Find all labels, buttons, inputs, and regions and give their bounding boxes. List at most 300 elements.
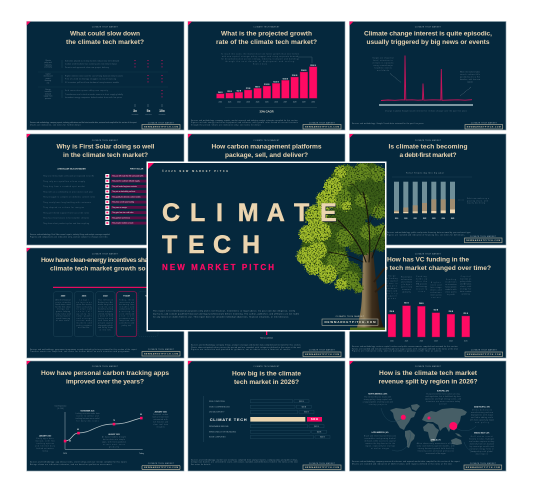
- footer: Figures are indicative and provided as guidance, not as advice or as a forecast of results.: [191, 348, 292, 351]
- brand button: NEWMARKETPITCH.COM: [324, 320, 376, 324]
- footer: NEWMARKETPITCH.COM: [305, 353, 339, 356]
- note: Europe: and regulation, but is held back by slow: [426, 395, 461, 398]
- bar chart: $102 B: [264, 84, 270, 86]
- factor rows: pressure: [45, 98, 51, 100]
- footer: CLIMATE TECH MARKET: [148, 348, 174, 351]
- stacked bar chart: equity declining: [467, 201, 485, 204]
- factor rows: Grid connection queues delay new capacity: [65, 89, 108, 92]
- annotation left: headline events: [374, 66, 392, 70]
- footer: Charts show estimated values across the period and are rounded, with categories defined in the notes at the end.: [191, 346, 302, 349]
- curve chart: Today: [139, 453, 144, 455]
- size comparison chart: $33 B: [302, 406, 307, 408]
- time horizons: revenues: [132, 114, 138, 116]
- comparison table: They recycle modules at scale: [112, 222, 134, 225]
- panel: what could slow down: the climate tech market?: [66, 39, 144, 46]
- timeline: wind projects: [56, 315, 70, 318]
- annotation right: search volume falls: [460, 74, 480, 76]
- column notes: share, with: [460, 285, 471, 288]
- factor rows: intensity and: [44, 75, 53, 78]
- note: Asia Pacific: and India adding scale: [471, 417, 493, 419]
- footer: Sources and methodology: company filings, analyst coverage and market data compiled and reviewed for this section.: [191, 344, 302, 346]
- note: January 2025: Personal carbon: [153, 414, 168, 416]
- timeline: economics and: [119, 318, 134, 320]
- note: Latin America: at earlier stages: [371, 447, 389, 450]
- timeline: policy risk.: [122, 325, 132, 327]
- size comparison chart: $35 B: [304, 412, 310, 414]
- panel: first solar: CLIMATE TECH MARKET: [92, 139, 118, 142]
- timeline: grants, helping: [56, 310, 70, 313]
- note: January 2025: insights: [156, 426, 165, 428]
- note: January 2025: automated with: [154, 418, 168, 421]
- disclaimer: key facts, and consult qualified financial and legal professionals before investing. The author, publisher, and affiliates are not liable: [153, 312, 299, 315]
- timeline: TODAY: [123, 294, 131, 297]
- stacked bar chart: 2022: [423, 218, 426, 220]
- column notes: deals and: [430, 290, 442, 292]
- column notes: pull in new: [401, 286, 413, 288]
- column notes: [386, 275, 472, 300]
- column notes: Surge: [388, 276, 396, 278]
- note: January 2025: [152, 410, 169, 428]
- footer: Values are rounded and include seed through late stage rounds, with categories defined in the notes at the end.: [352, 347, 459, 350]
- panel: what could slow down: CLIMATE TECH MARKET: [92, 25, 118, 28]
- panel: carbon tracking apps: [27, 361, 184, 471]
- column notes: to profit: [447, 293, 455, 296]
- panel: market size 2026: CLIMATE TECH MARKET: [253, 365, 280, 368]
- note: November 2021: for daily decisions: [76, 420, 99, 422]
- footer: NEWMARKETPITCH.COM: [466, 466, 500, 469]
- panel: debt first: [350, 134, 506, 245]
- note: Latin America: region, especially for startups: [365, 444, 395, 448]
- column notes: stabilises: [445, 280, 457, 284]
- note: January 2025: rich features and: [153, 420, 168, 424]
- bar chart: 2021: [228, 102, 231, 104]
- highlighted row: CLIMATE TECH: [210, 417, 247, 422]
- column notes: despite: [387, 284, 397, 288]
- footer: CLIMATE TECH MARKET: [471, 122, 497, 124]
- note: Asia Pacific: ASIA PACIFIC | 30%: [474, 406, 490, 408]
- panel: clean energy incentives: [27, 248, 184, 358]
- column notes: energy for: [460, 288, 472, 290]
- note: August 2023: across most users: [103, 443, 125, 446]
- factor rows: financing: [45, 80, 51, 82]
- timeline: The Inflation: [98, 298, 113, 302]
- footer: NEWMARKETPITCH.COM: [467, 353, 501, 356]
- footer: CLIMATE TECH MARKET: [309, 348, 335, 352]
- column notes: as low rates: [401, 278, 412, 281]
- comparison table: They depend on volume for margins: [43, 207, 84, 209]
- factor rows: demand: [45, 93, 51, 95]
- note: Asia Pacific: China dominates: [472, 408, 492, 412]
- comparison table: They buy from a crowded spot market: [43, 185, 86, 188]
- heading: Climate change interest is quite episodic,: [364, 30, 492, 37]
- note: November 2021: NOVEMBER 2021: [81, 410, 95, 412]
- note: January 2020: behind estimates: [36, 447, 54, 450]
- curve chart: 75: [113, 420, 115, 422]
- timeline: energy tax: [57, 308, 69, 311]
- footer: Sources and methodology: First Solar annual reports, industry filings and analyst coverage compiled.: [30, 233, 111, 236]
- annotation left: brief, attention to: [374, 59, 393, 62]
- note: Europe: EUROPE | 22%: [437, 390, 449, 392]
- bar chart: 2025: [464, 341, 468, 343]
- column notes: rises: [418, 291, 425, 293]
- column notes: late stage: [430, 286, 442, 289]
- note: Middle East: and carbon capture as they: [469, 440, 494, 443]
- bar chart: 2030: [311, 102, 315, 104]
- factor rows: VC investors pull back from hardware heavy business models: [65, 81, 119, 84]
- bar chart: 2025: [265, 102, 269, 104]
- panel: carbon management: [188, 134, 345, 245]
- factor rows: supply chain: [44, 96, 53, 98]
- bar chart: [216, 57, 317, 114]
- note: November 2021: tracking became more useful: [76, 417, 100, 420]
- comparison table: They gain from tax credit rules: [112, 211, 134, 214]
- timeline: NEXT: [145, 295, 151, 297]
- stacked bar chart: Debt now makes up a: [467, 197, 489, 200]
- heading: How have clean-energy incentives shaped the: [41, 257, 169, 264]
- intro paragraph: Source data: [253, 62, 267, 66]
- timeline: early solar and: [56, 313, 71, 315]
- heading: What could slow down: [70, 30, 140, 37]
- column notes: pandemic: [386, 288, 398, 290]
- footer: Sources and methodology: company reports, industry publications and the latest market data, reviewed and compiled for this section of the report.: [30, 121, 138, 124]
- note: North America: NORTH AMERICA | 38%: [368, 392, 388, 396]
- note: Middle East: Gulf states invest: [471, 435, 493, 438]
- column notes: narrows as: [460, 278, 471, 280]
- bar chart: 2023: [434, 341, 438, 343]
- column notes: globally: [402, 292, 411, 294]
- timeline: core demand: [119, 313, 134, 315]
- intro paragraph: To reach this scale, the market must see faster growth than ever before: [221, 52, 299, 56]
- comparison headers: A REGULAR SILICON MAKER: [57, 168, 86, 170]
- footer: [30, 233, 111, 238]
- footer: See notes for details.: [191, 463, 212, 466]
- bar chart: $91 B: [404, 303, 410, 305]
- footer: [387, 231, 502, 243]
- note: Middle East: [469, 432, 494, 456]
- timeline: 2015: [82, 295, 87, 297]
- comparison table: They own the cadmium telluride supply: [112, 180, 140, 183]
- footer: NEWMARKETPITCH.COM: [305, 126, 339, 128]
- footer: Figures include energy transition equipment and software, with growth rates based on recent forecasts: [191, 121, 298, 124]
- footer: Sources and methodology: app release notes, store listings and user reviews compiled for this report.: [30, 460, 128, 464]
- comparison table: They rarely have long backlog with customers: [43, 201, 91, 204]
- factor rows: risk: [47, 82, 49, 84]
- disclaimer: for any losses or claims from its use. This report does not consider individual objectives, financial situations, or risk tolerance.: [153, 315, 290, 318]
- footer: NEWMARKETPITCH.COM: [305, 466, 339, 469]
- column notes: Record year: [401, 276, 412, 278]
- footer: [352, 345, 502, 356]
- time horizons: revenues: [159, 114, 165, 116]
- size comparison chart: RIDE COMPUTING: [209, 401, 225, 403]
- note: Middle East: national energy firms in: [470, 448, 494, 450]
- note: Middle East: MIDDLE EAST | 4%: [474, 432, 490, 434]
- column notes: Funding: [416, 276, 427, 278]
- footer: [30, 121, 180, 129]
- panel: carbon management: CLIMATE TECH MARKET: [253, 139, 280, 142]
- brand button: CLIMATE TECH MARKET: [336, 315, 365, 318]
- heading: How carbon management platforms: [212, 143, 322, 150]
- time horizons: [132, 104, 165, 116]
- heading: Is climate tech becoming: [388, 143, 468, 150]
- size comparison chart: SEMICONDUCTOR PACKAGING: [209, 430, 237, 433]
- bar chart: 2022: [237, 102, 241, 104]
- panel: revenue by region: [350, 361, 506, 471]
- note: Africa: solar and mobile payment models, with: [417, 444, 455, 448]
- title: TECH: [163, 232, 261, 260]
- bar chart: 2024: [256, 102, 259, 104]
- column notes: favour proven: [445, 286, 457, 288]
- timeline: 2022: [103, 295, 109, 297]
- panel: revenue by region: revenue split by region in 2026?: [378, 378, 478, 386]
- curve chart: [55, 406, 144, 455]
- bar chart: 2020: [390, 341, 394, 343]
- footer: NEWMARKETPITCH.COM: [144, 466, 178, 469]
- line chart: [379, 56, 473, 112]
- column notes: Higher: [431, 282, 441, 284]
- note: January 2020: JANUARY 2020: [39, 434, 51, 438]
- column notes: IRA passes: [416, 282, 427, 286]
- image: tree: [296, 163, 385, 330]
- note: January 2020: manual, with few: [36, 440, 55, 442]
- bar chart: 2026: [274, 102, 278, 104]
- note: January 2020: Early apps were: [36, 438, 54, 440]
- kicker: ©2026 NEW MARKET PITCH: [162, 170, 228, 173]
- timeline: credits and: [98, 305, 113, 308]
- panel: clean energy incentives: CLIMATE TECH MARKET: [92, 252, 118, 256]
- annotation left: [372, 56, 401, 82]
- column notes: clear paths: [445, 290, 457, 294]
- footer: Sources and methodology: venture capital trackers and public announcements compiled and reviewed for this section.: [352, 345, 459, 348]
- bar chart: $240 B: [301, 69, 307, 72]
- bar chart: 2028: [293, 102, 296, 104]
- comparison table: They use China made cells and are exposed to tariffs: [43, 174, 94, 178]
- timeline: gave the sector: [76, 303, 92, 306]
- footer: CLIMATE TECH MARKET: [148, 122, 174, 124]
- note: January 2025: JANUARY 2025: [154, 410, 167, 414]
- panel: projected growth rate: CLIMATE TECH MARKET: [253, 25, 280, 28]
- curve chart: 2020: [63, 453, 67, 455]
- bar chart: $63 B: [434, 310, 439, 312]
- panel: VC funding: CLIMATE TECH MARKET: [415, 252, 441, 256]
- note: Middle East: heavily in solar, hydrogen: [469, 438, 494, 440]
- size comparison chart: RENEWABLE MEDICAL: [209, 425, 229, 428]
- column notes: policy shifts: [460, 280, 471, 283]
- panel: interest episodic: [350, 22, 506, 130]
- annotation right: baseline, with few new: [460, 78, 481, 81]
- note: Middle East: partnership with global: [471, 450, 493, 453]
- bar chart: $56 B: [449, 311, 454, 313]
- note: Africa: Africa shows early momentum in off grid: [417, 442, 455, 445]
- title: CLIMATE: [162, 199, 337, 227]
- comparison table: They have a multi year backlog: [112, 201, 134, 204]
- timeline: central, bringing: [98, 312, 113, 315]
- annotation left: Surges are sharp but: [372, 56, 394, 60]
- bottom label: [260, 331, 273, 340]
- footer: Timeline events are simplified, see notes for further detail on each incentive and programme.: [30, 350, 131, 353]
- column notes: growing: [462, 294, 470, 296]
- size comparison chart: $42 B: [314, 426, 320, 428]
- size comparison chart: VIDEO CONFERENCING: [209, 406, 230, 408]
- footer: NEWMARKETPITCH.COM: [144, 352, 178, 356]
- timeline: at new scale.: [56, 319, 71, 322]
- bar chart: $62 B: [237, 90, 242, 92]
- timeline: factories and: [98, 317, 113, 320]
- timeline: across many: [76, 320, 92, 322]
- column notes: and climate: [401, 280, 412, 284]
- note: Asia Pacific: manufacturing and new: [471, 411, 494, 414]
- panel: projected growth rate: [188, 22, 345, 130]
- comparison table: They perform well in heat: [112, 216, 130, 220]
- timeline: worldwide.: [78, 327, 91, 329]
- note: January 2020: tracking options: [36, 442, 54, 445]
- column notes: holds up: [416, 278, 427, 280]
- bar chart: 2029: [302, 102, 306, 104]
- bar chart: $88 B: [419, 303, 424, 305]
- bar chart: 2022: [420, 341, 423, 343]
- bar chart: 2021: [405, 341, 408, 343]
- footer: CLIMATE TECH MARKET: [309, 122, 335, 124]
- note: November 2021: easier to collect and: [76, 414, 99, 418]
- note: Europe: approvals and high energy costs, and: [425, 398, 461, 400]
- column notes: fears and: [387, 290, 397, 292]
- note: North America: strong policy, deep capital and: [364, 398, 392, 401]
- footer: Comparison markets are selected for scale, with values rounded, and definitions listed in the notes at the end.: [191, 461, 299, 464]
- note: Middle East: by sovereign wealth and: [470, 445, 494, 448]
- panel: hidden chart: [188, 248, 345, 358]
- factor rows: policy and: [44, 62, 52, 64]
- note: Africa: across much of the region: [426, 452, 446, 455]
- bar chart: $56 B: [390, 311, 395, 313]
- annotation right: signals: [467, 82, 473, 84]
- intro paragraph: with new capital, stronger policy support and rising corporate demand: [222, 55, 298, 58]
- heading: How has VC funding in the: [387, 256, 469, 264]
- size comparison chart: $31 B: [299, 401, 305, 403]
- timeline: pivoting to: [119, 310, 134, 313]
- comparison table: They sell under long term contracts: [112, 185, 137, 188]
- timeline: customers and: [119, 322, 134, 324]
- note: August 2023: apps, with more guidance: [102, 440, 126, 444]
- note: August 2023: better data into simple: [103, 438, 125, 441]
- note: Asia Pacific: with more capacity by region: [470, 418, 494, 422]
- bar chart: 33% CAGR: [259, 110, 274, 114]
- note: North America: a large pipeline of utility scale and: [363, 400, 393, 404]
- column notes: Funding: [446, 279, 456, 281]
- factor rows: Carbon credit markets face scrutiny over real climate impact: [65, 63, 118, 66]
- title: [162, 199, 337, 260]
- column notes: reset across: [430, 294, 442, 296]
- footer: Figures are indicative only, and are provided as guidance rather than as advice.: [352, 350, 443, 352]
- note: Middle East: diversify from oil, backed: [470, 444, 494, 446]
- timeline: incentives are: [119, 301, 134, 304]
- curve chart: User Experience: [55, 406, 67, 408]
- stacked bar chart: [392, 172, 489, 220]
- bar chart: $49 B: [218, 91, 223, 94]
- size comparison chart: EDGE COMPUTING: [209, 437, 226, 439]
- panel: first solar: in the climate tech market?: [63, 152, 148, 159]
- comparison table: They rely on crystalline silicon supply: [43, 180, 85, 183]
- note: Asia Pacific: and policy: [475, 422, 489, 424]
- bar chart: $55 B: [227, 91, 233, 93]
- comparison table: They face heat losses in hot weather climates: [43, 216, 89, 220]
- panel: clean energy incentives: climate tech market growth so far?: [50, 266, 160, 272]
- bar chart: $125 B: [273, 81, 280, 83]
- note: Africa: [417, 438, 455, 455]
- panel: carbon tracking apps: improved over the years?: [66, 378, 144, 386]
- time horizons: 5x: [147, 109, 150, 113]
- factor rows: Higher interest rates raise the cost of long duration climate assets: [65, 74, 123, 77]
- annotation right: When the moment fades: [460, 70, 480, 74]
- time horizons: 10x: [159, 109, 165, 113]
- footer: Ratings shown are indicative estimates, and are based on qualitative assessment.: [30, 463, 113, 466]
- comparison table: They earn on margin: [112, 207, 127, 209]
- timeline: crisis, stimulus: [56, 301, 71, 304]
- timeline: made long term: [98, 303, 114, 306]
- timeline: Longer: [80, 300, 89, 302]
- factor rows: Permits and approvals slow new project delivery: [65, 66, 109, 69]
- curve chart: 40: [69, 440, 71, 443]
- footer: Sources and methodology: government programme records and policy history reviewed for this section of the report.: [30, 348, 138, 351]
- curve chart: 90: [140, 414, 142, 416]
- stacked bar chart: 2024: [442, 217, 445, 220]
- note: January 2020: [35, 434, 55, 452]
- comparison table: They sell as a commodity on price alone each year: [43, 190, 93, 193]
- comparison table: They qualify for domestic content credits: [112, 196, 141, 198]
- note: Latin America: [364, 431, 397, 450]
- column notes: grows: [388, 298, 396, 300]
- panel: projected growth rate: rate of the climate tech market?: [216, 39, 317, 46]
- curve chart: 60: [77, 429, 79, 431]
- comparison table: They get limited support from tax credit rules: [43, 211, 89, 214]
- heading: How big is the climate: [232, 370, 301, 377]
- bar chart: $190 B: [292, 75, 298, 77]
- footer: CLIMATE TECH MARKET: [470, 235, 496, 238]
- panel: VC funding: [350, 248, 506, 358]
- note: Africa: strong demand growth held back by: [418, 447, 454, 450]
- column notes: support: [387, 294, 397, 298]
- stacked bar chart: 2025: [451, 218, 454, 220]
- footer: Sources and methodology: public and private financing data reviewed by year and asset type.: [387, 231, 472, 234]
- timeline: alongside public: [98, 325, 113, 327]
- column notes: in funding: [386, 278, 398, 280]
- note: Africa: AFRICA | 2%: [431, 438, 441, 442]
- time horizons: 3x: [133, 109, 137, 113]
- note: Asia Pacific: [470, 406, 494, 424]
- timeline: to plan and: [76, 308, 92, 311]
- note: North America: The United States leads with: [364, 396, 391, 398]
- panel: what could slow down: [27, 22, 184, 130]
- footer: Shares are rounded and indicative of 2026 revenue, with regions defined in the notes at the end.: [352, 462, 453, 465]
- note: August 2023: AUGUST 2023: [108, 433, 120, 436]
- panel: revenue by region: CLIMATE TECH MARKET: [415, 365, 441, 368]
- comparison table: [43, 174, 148, 225]
- footer: through the period. Charts are indicative only, see notes for detail.: [191, 123, 262, 126]
- column notes: rates cool: [430, 284, 442, 286]
- annotation left: climate is episodic: [372, 62, 394, 64]
- disclaimer: [153, 310, 299, 318]
- bar chart: $51 B: [463, 313, 469, 315]
- panel: market size 2026: [188, 361, 345, 471]
- column notes: as investors: [445, 283, 457, 286]
- timeline: in the US.: [99, 328, 112, 331]
- comparison headers: FIRST SOLAR: [130, 168, 144, 170]
- footer: CLIMATE TECH MARKET: [470, 462, 496, 465]
- timeline: a wave of new: [98, 316, 114, 318]
- column notes: models with: [445, 288, 457, 291]
- factor rows: regulatory: [44, 63, 52, 66]
- comparison table: They struggle to compete on domestic content rules: [43, 196, 95, 198]
- heading: How have personal carbon tracking apps: [41, 370, 169, 377]
- timeline: Today, these: [119, 298, 134, 302]
